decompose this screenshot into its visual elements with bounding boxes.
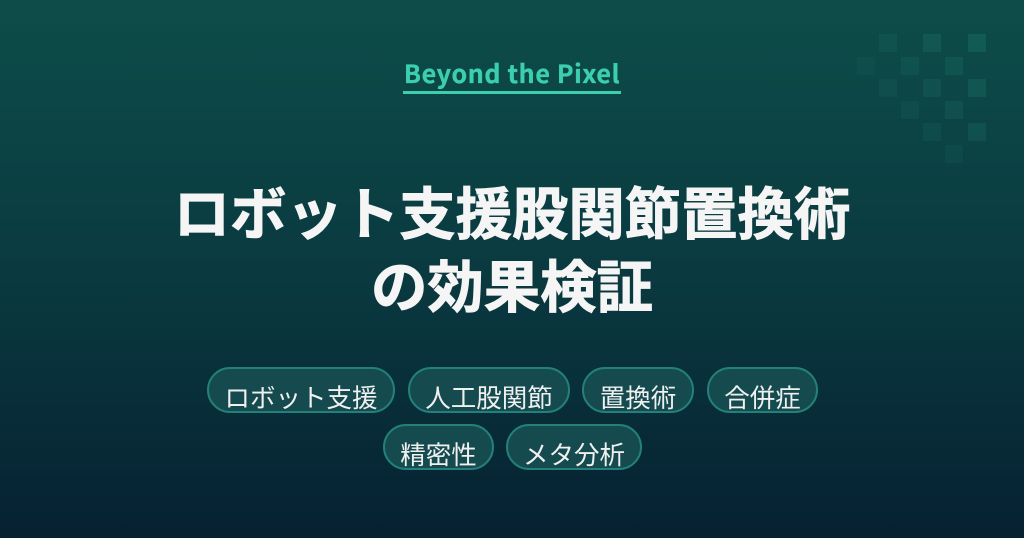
tag: メタ分析: メタ分析 xyxy=(523,435,625,472)
tag: ロボット支援 xyxy=(207,367,395,413)
tag: 置換術 xyxy=(582,367,694,413)
tag: ロボット支援: ロボット支援 xyxy=(224,378,378,415)
tag: 置換術: 置換術 xyxy=(600,378,676,415)
tag: メタ分析 xyxy=(506,424,642,470)
title xyxy=(174,170,850,324)
title: の効果検証 xyxy=(371,243,653,324)
tag: 合併症 xyxy=(707,367,818,413)
title: ロボット支援股関節置換術 xyxy=(174,170,850,251)
tag: 精密性: 精密性 xyxy=(400,435,477,472)
tag: 人工股関節 xyxy=(408,367,570,413)
tag: 精密性 xyxy=(383,424,494,470)
brand label with underline: Beyond the Pixel xyxy=(404,55,620,91)
decorative square pattern xyxy=(879,34,986,141)
tag: 合併症: 合併症 xyxy=(724,378,801,415)
tag: 人工股関節: 人工股関節 xyxy=(425,378,553,415)
